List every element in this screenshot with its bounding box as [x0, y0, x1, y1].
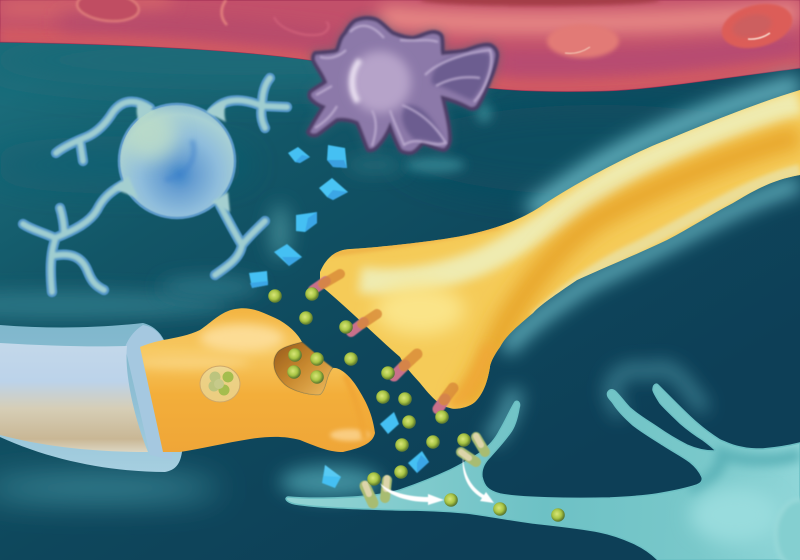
nucleus highlight: [352, 60, 360, 102]
myelin sheath: [0, 323, 182, 472]
astrocyte nucleus shading: [165, 140, 194, 180]
nucleus: [349, 51, 411, 113]
red blood cell: centre: [274, 17, 329, 35]
axon: yellow presynaptic fibre and terminal: [320, 90, 800, 409]
postsynaptic dendrite: [286, 384, 800, 560]
neurotransmitter spheres: [268, 287, 565, 522]
astrocyte processes: [23, 78, 287, 292]
axon base: [320, 90, 800, 409]
blood vessel: [0, 0, 800, 91]
presynaptic reuptake receptors: [313, 274, 453, 409]
postsynaptic dendrite glow: [490, 368, 705, 440]
arrow: left receptor to dendrite: [380, 483, 444, 505]
receptor 4: [438, 388, 453, 409]
receptor pair right: [461, 436, 485, 462]
cell halo: [308, 18, 497, 153]
cell body: [308, 18, 497, 153]
arrow: right receptor to dendrite: [463, 457, 494, 503]
red blood cell: far right: [721, 3, 793, 49]
presynaptic bouton: [130, 308, 375, 452]
receptor 1: [313, 274, 340, 290]
tube body: [0, 343, 148, 452]
release pocket: [274, 342, 333, 395]
red blood cell: right centre: [547, 24, 619, 58]
process bases: [113, 102, 230, 212]
receptor 3: [394, 354, 417, 376]
purple microglia cell: [308, 18, 497, 153]
astrocyte: blue glial cell: [23, 78, 287, 292]
astrocyte pale cytoplasm: [122, 109, 178, 161]
glow halo along axon: [505, 84, 800, 350]
red blood cell: small edge: [222, 0, 227, 25]
lobe shading: [402, 52, 490, 143]
red blood cell: upper left: [76, 0, 140, 24]
sheath inner rim: [125, 325, 172, 460]
receptor 2: [351, 314, 377, 332]
axon shading: [330, 102, 800, 405]
blue cubes: [249, 145, 429, 488]
vesicle with neurotransmitters: [200, 366, 240, 402]
receptor pair left: [365, 478, 387, 503]
outer sheath: [0, 323, 182, 472]
postsynaptic receptors: [365, 436, 485, 503]
nucleus outline: [780, 497, 800, 560]
membrane folds: [315, 26, 491, 146]
astrocyte body: [119, 104, 235, 218]
